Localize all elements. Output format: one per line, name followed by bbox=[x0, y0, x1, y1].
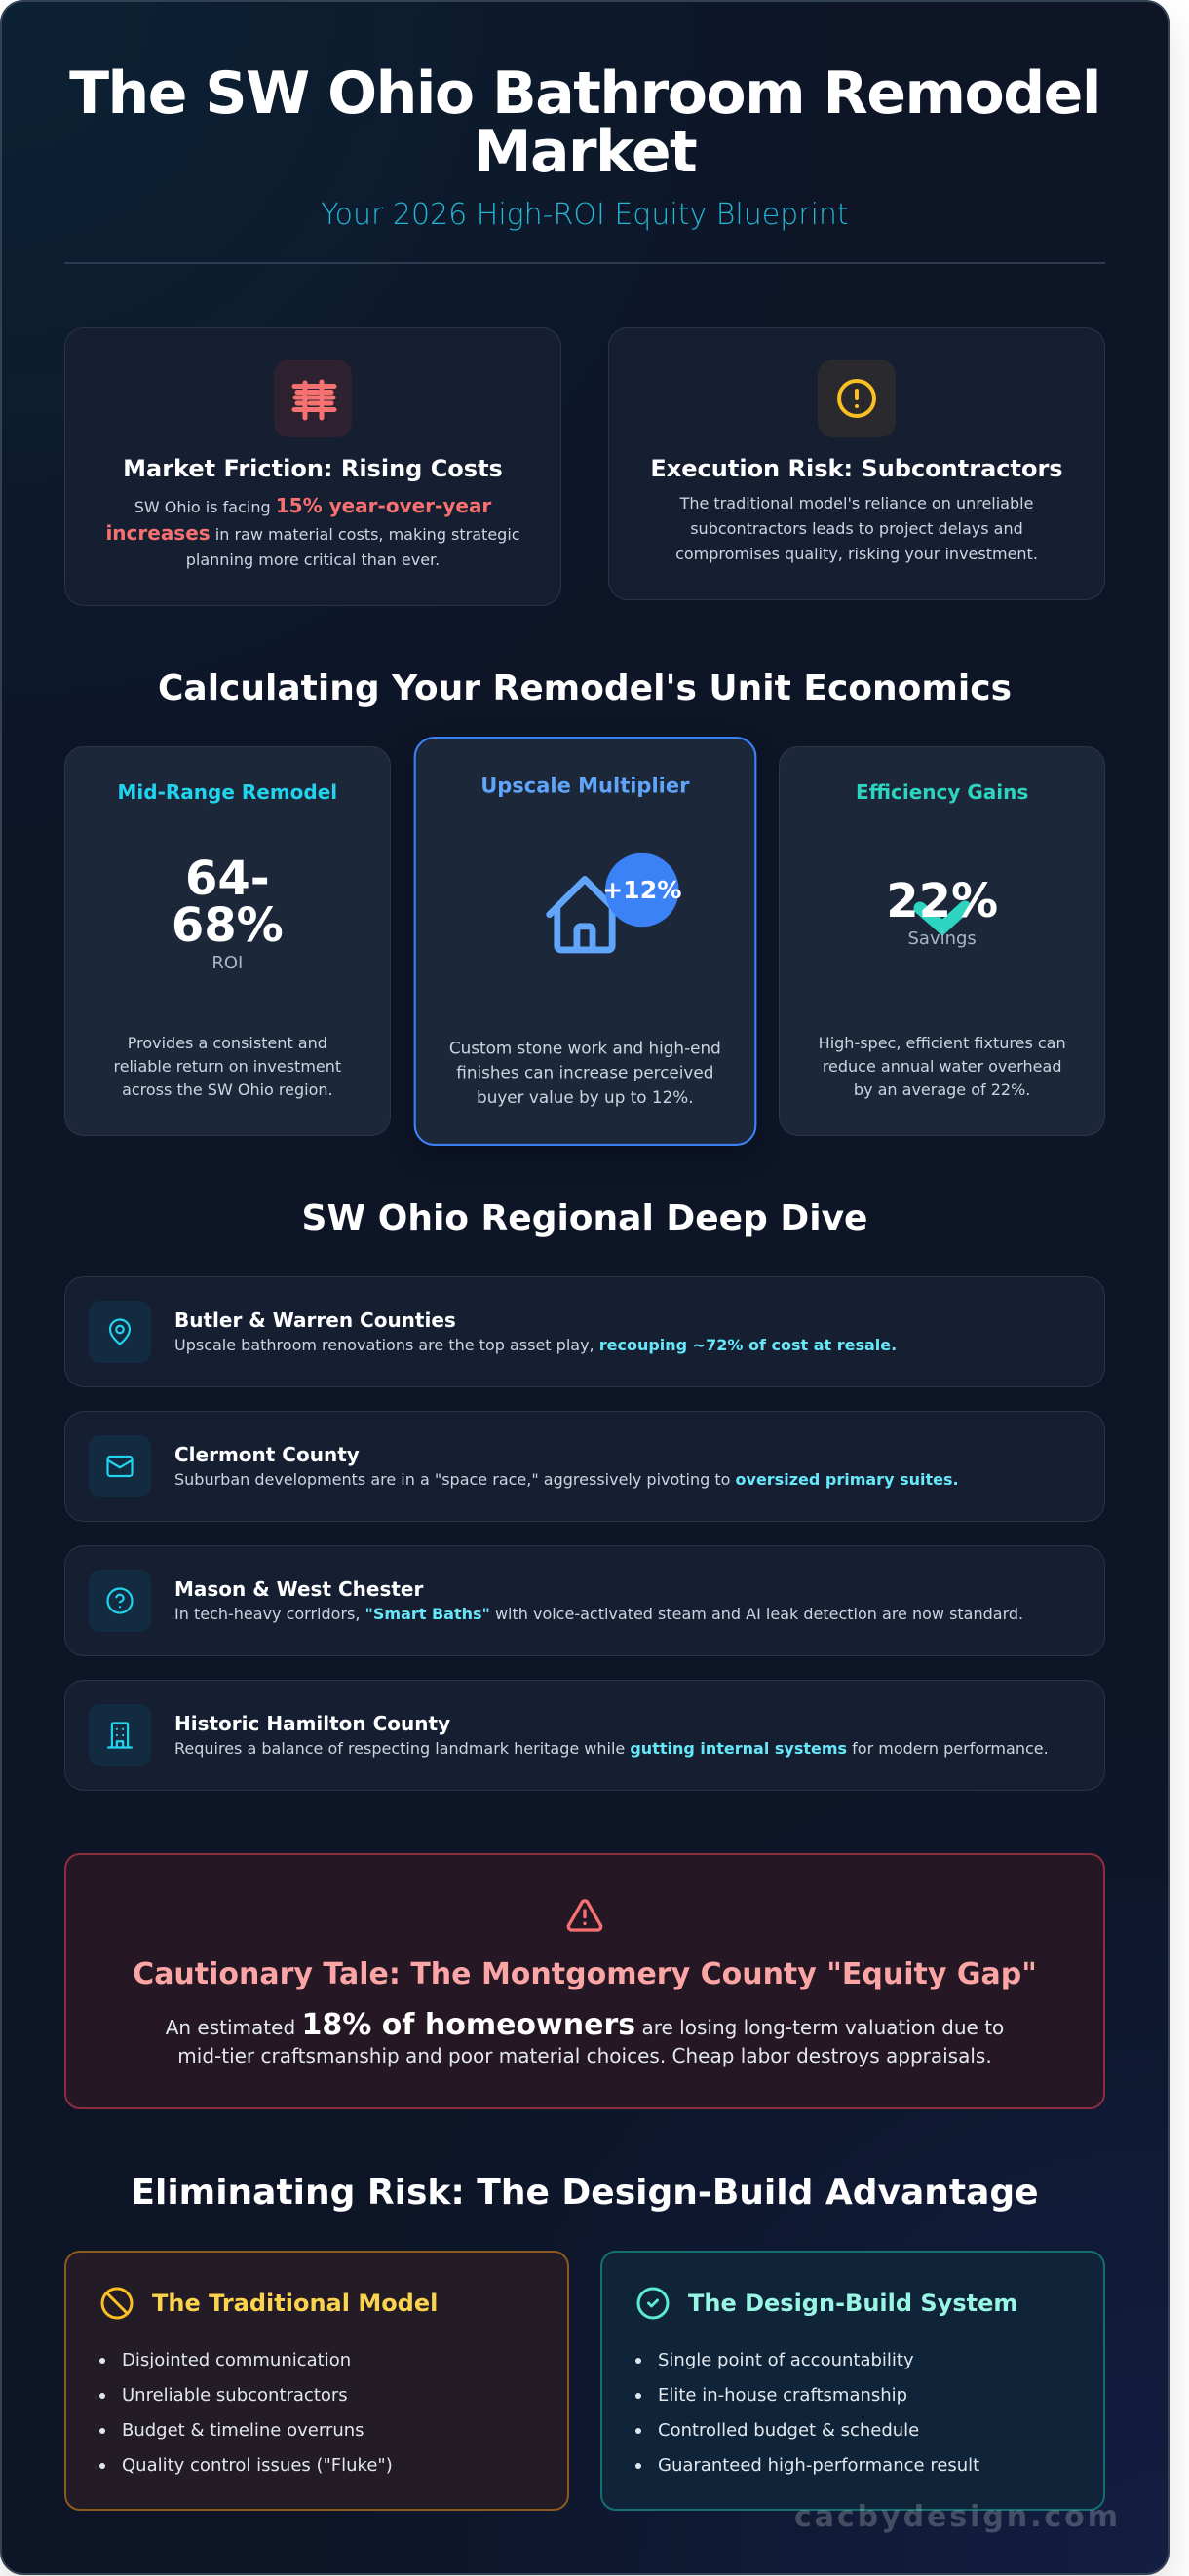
region text: Suburban developments are in a "space race," aggressively pivoting to oversized primary suites. bbox=[174, 1470, 959, 1489]
card title: Upscale Multiplier bbox=[480, 774, 689, 798]
panel: design-build system bbox=[600, 2251, 1105, 2511]
watermark: cacbydesign.com bbox=[794, 2500, 1121, 2534]
callout text bbox=[166, 2008, 1004, 2067]
panel: upscale multiplier bbox=[413, 737, 756, 1146]
panel: Butler & Warren bbox=[64, 1276, 1105, 1387]
icon: check bbox=[914, 900, 971, 935]
icon: ban bbox=[101, 2288, 133, 2319]
region name: Mason & West Chester bbox=[174, 1577, 423, 1601]
icon: house with badge: +12% bbox=[602, 875, 681, 904]
icon: bricks bbox=[274, 360, 352, 437]
heading: unit economics: Calculating Your Remodel's Unit Economics bbox=[158, 668, 1012, 708]
list: Elite in-house craftsmanship bbox=[658, 2385, 907, 2406]
region name: Historic Hamilton County bbox=[174, 1712, 450, 1735]
metric: 68% bbox=[172, 898, 284, 953]
region text: Upscale bathroom renovations are the top asset play, recouping ~72% of cost at resale. bbox=[174, 1336, 897, 1354]
heading: regional deep dive: SW Ohio Regional Deep Dive bbox=[302, 1198, 867, 1238]
panel: Historic Hamilton bbox=[64, 1680, 1105, 1791]
text block: SW Ohio is facing 15% year-over-year increases in raw material costs, making strategic planning more critical than ever. bbox=[105, 494, 520, 569]
description: Custom stone work and high-end finishes can increase perceived buyer value by up to 12%. bbox=[449, 1039, 720, 1107]
panel: traditional model bbox=[64, 2251, 569, 2511]
panel title: The Design-Build System bbox=[688, 2290, 1017, 2317]
icon: mail bbox=[89, 1435, 151, 1497]
title: The SW Ohio Bathroom Remodel bbox=[69, 59, 1100, 128]
heading: Execution Risk: Subcontractors bbox=[650, 455, 1063, 482]
callout text: An estimated 18% of homeowners are losing long-term valuation due to bbox=[166, 2008, 1004, 2042]
region name: Butler & Warren Counties bbox=[174, 1308, 456, 1332]
icon: map pin bbox=[89, 1301, 151, 1363]
region text: In tech-heavy corridors, "Smart Baths" with voice-activated steam and AI leak detection are now standard. bbox=[174, 1605, 1023, 1623]
metric bbox=[172, 852, 284, 953]
heading: Market Friction: Rising Costs bbox=[123, 455, 503, 482]
region name: Clermont County bbox=[174, 1443, 360, 1466]
list: Quality control issues ("Fluke") bbox=[122, 2455, 393, 2476]
list: Disjointed communication bbox=[122, 2350, 351, 2370]
heading: design-build advantage: Eliminating Risk: The Design-Build Advantage bbox=[131, 2173, 1039, 2213]
card title: Mid-Range Remodel bbox=[117, 780, 337, 804]
title bbox=[69, 59, 1100, 186]
icon: question circle bbox=[89, 1570, 151, 1632]
icon: exclamation circle bbox=[818, 360, 896, 437]
description: High-spec, efficient fixtures can reduce annual water overhead by an average of 22%. bbox=[819, 1034, 1066, 1099]
region text: Requires a balance of respecting landmark heritage while gutting internal systems for modern performance. bbox=[174, 1739, 1049, 1758]
panel: Mason & West Chester bbox=[64, 1545, 1105, 1656]
card title: Efficiency Gains bbox=[856, 780, 1028, 804]
metric label: ROI bbox=[211, 953, 243, 973]
metric label: Savings bbox=[907, 928, 977, 949]
panel: Clermont bbox=[64, 1411, 1105, 1522]
callout heading: Cautionary Tale: The Montgomery County "Equity Gap" bbox=[133, 1957, 1037, 1991]
list: Unreliable subcontractors bbox=[122, 2385, 348, 2406]
list: Guaranteed high-performance result bbox=[658, 2455, 979, 2476]
panel: market friction bbox=[64, 327, 561, 606]
list: Budget & timeline overruns bbox=[122, 2420, 364, 2441]
metric: 22% bbox=[886, 874, 998, 928]
callout text: mid-tier craftsmanship and poor material choices. Cheap labor destroys appraisals. bbox=[177, 2044, 992, 2067]
icon: house with badge bbox=[546, 853, 681, 953]
title: Market bbox=[474, 118, 696, 186]
icon: warning triangle bbox=[567, 1899, 602, 1932]
description: Provides a consistent and reliable return on investment across the SW Ohio region. bbox=[113, 1034, 341, 1099]
icon: building bbox=[89, 1704, 151, 1766]
panel title: The Traditional Model bbox=[152, 2290, 438, 2317]
list: Single point of accountability bbox=[658, 2350, 914, 2370]
metric: 64- bbox=[185, 852, 270, 906]
panel: efficiency gains bbox=[779, 746, 1105, 1136]
subtitle: Your 2026 High-ROI Equity Blueprint bbox=[321, 198, 849, 232]
icon: check circle bbox=[637, 2288, 669, 2319]
panel: mid-range remodel bbox=[64, 746, 391, 1136]
callout: cautionary tale bbox=[64, 1853, 1105, 2109]
list bbox=[99, 2350, 393, 2476]
list: Controlled budget & schedule bbox=[658, 2420, 919, 2441]
text block: The traditional model's reliance on unreliable subcontractors leads to project delays and compromises quality, risking your investment. bbox=[675, 494, 1038, 563]
panel: execution risk bbox=[608, 327, 1105, 600]
list bbox=[635, 2350, 979, 2476]
